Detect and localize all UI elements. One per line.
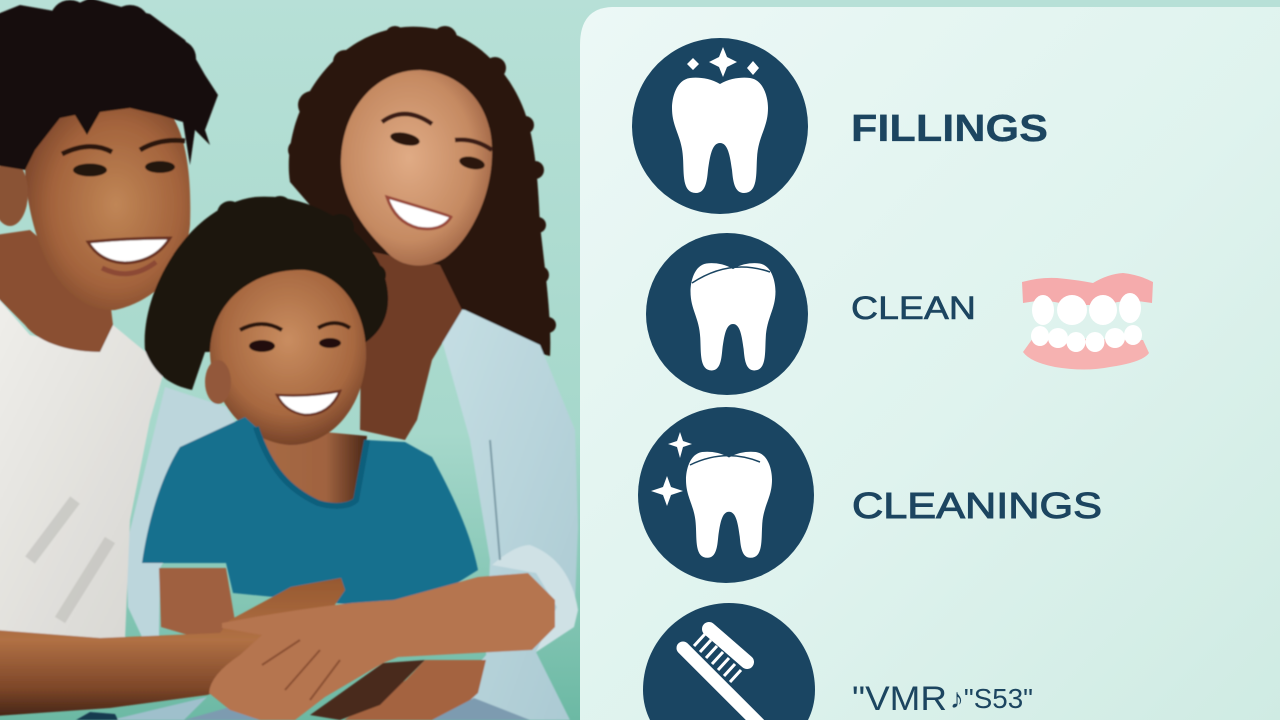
icon: dentures (1022, 273, 1153, 370)
heading: fillings: FILLINGS (851, 108, 1048, 150)
heading: garbled label: ♪"S53" (950, 683, 1033, 714)
family photo (0, 0, 578, 720)
heading: garbled label (852, 680, 1033, 718)
adult woman (126, 26, 578, 720)
denim (76, 697, 530, 720)
icon: tooth with stars (638, 407, 814, 583)
icon: toothbrush (643, 603, 815, 720)
icon: tooth with sparkles (632, 38, 808, 214)
heading: garbled label: "VMR (852, 680, 947, 718)
heading: cleanings: CLEANINGS (852, 485, 1102, 526)
heading: clean: CLEAN (851, 290, 976, 326)
child (142, 196, 486, 720)
icon: tooth clean (646, 233, 808, 395)
panel background (580, 7, 1280, 720)
panel (580, 7, 1280, 720)
woman's arm and hand (209, 573, 555, 720)
adult man (0, 0, 218, 640)
man's arm and hand (0, 578, 345, 716)
